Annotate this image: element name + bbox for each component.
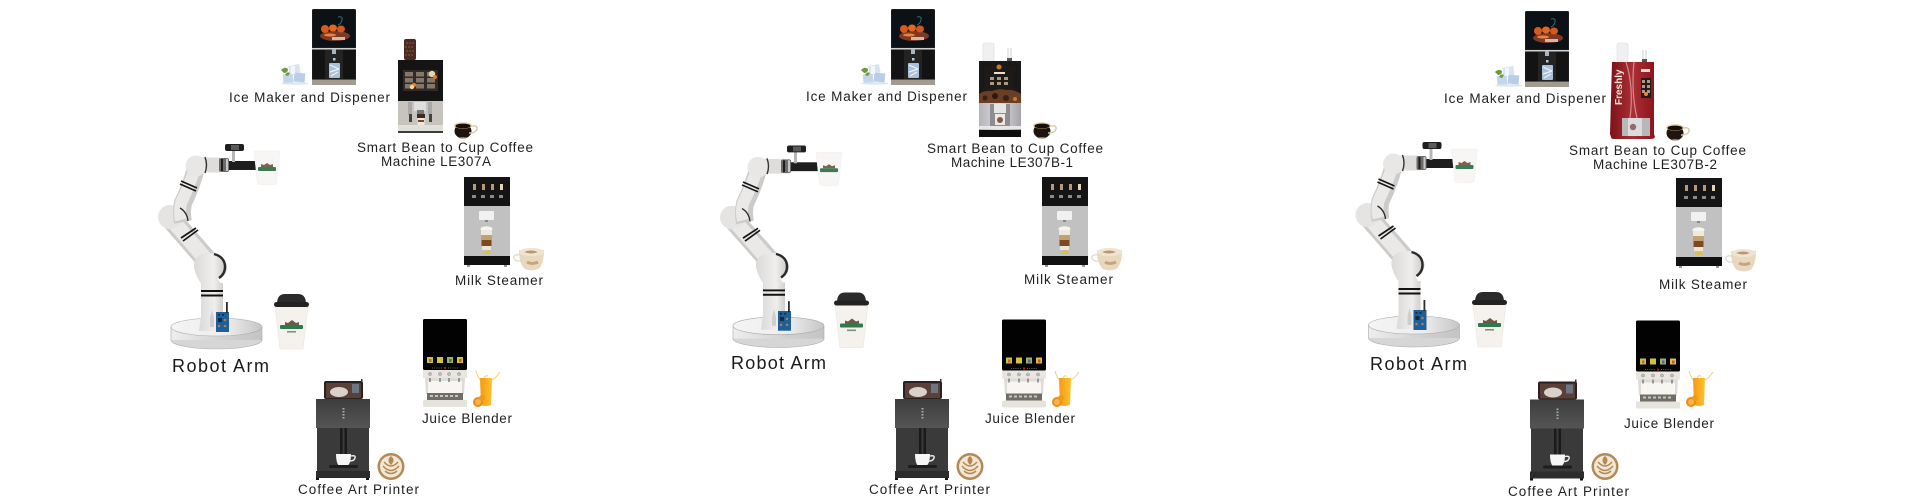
icon: latte art — [956, 453, 984, 480]
icon: coffee machine LE307B-1 — [979, 43, 1021, 137]
icon: orange juice glass — [1052, 371, 1079, 407]
label: art printer: Coffee Art Printer — [298, 482, 420, 497]
icon: latte mug — [1726, 249, 1756, 272]
icon: ice cubes — [861, 64, 889, 85]
icon: juice machine — [1002, 320, 1046, 408]
label: milk steamer: Milk Steamer — [455, 273, 544, 288]
icon: orange juice glass — [473, 371, 500, 407]
label: ice maker: Ice Maker and Dispener — [229, 90, 390, 105]
icon: lidded paper cup — [274, 294, 309, 349]
icon: latte art — [378, 453, 404, 480]
icon: ice cubes — [281, 64, 309, 85]
icon: latte art — [1592, 453, 1618, 480]
label: coffee machine: Machine LE307A — [381, 154, 491, 169]
icon: juice machine — [423, 319, 467, 407]
icon: lidded paper cup — [834, 292, 869, 348]
panel: LE307B-1 robot coffee station — [720, 9, 1122, 497]
label: juice blender: Juice Blender — [985, 411, 1076, 426]
icon: coffee machine LE307B-2: Freshly — [1614, 69, 1625, 105]
panel: LE307B-2 robot coffee station — [1356, 11, 1756, 499]
icon: robot arm — [1356, 142, 1478, 347]
label: robot arm: Robot Arm — [1370, 354, 1467, 374]
icon: orange juice glass — [1686, 371, 1713, 407]
icon: art printer — [316, 379, 370, 480]
label: coffee machine: Machine LE307B-1 — [951, 155, 1073, 170]
icon: latte mug — [514, 248, 544, 270]
icon: latte mug — [1092, 248, 1122, 270]
label: milk steamer: Milk Steamer — [1024, 272, 1114, 287]
label: milk steamer: Milk Steamer — [1659, 277, 1748, 292]
icon: black coffee cup — [1666, 124, 1689, 141]
icon: robot arm — [158, 144, 280, 349]
label: juice blender: Juice Blender — [422, 411, 512, 426]
label: art printer: Coffee Art Printer — [869, 482, 990, 497]
icon: ice cubes — [1495, 66, 1523, 87]
label: coffee machine: Machine LE307B-2 — [1593, 157, 1717, 172]
label: juice blender: Juice Blender — [1624, 416, 1714, 431]
icon: coffee machine LE307A — [398, 39, 443, 133]
icon: ice maker machine — [312, 9, 356, 85]
label: robot arm: Robot Arm — [731, 353, 826, 373]
icon: black coffee cup — [454, 122, 477, 139]
label: coffee machine: Smart Bean to Cup Coffee — [357, 140, 533, 155]
icon: milk steamer machine — [1676, 178, 1722, 268]
label: ice maker: Ice Maker and Dispener — [1444, 91, 1606, 106]
icon: milk steamer machine — [1042, 177, 1088, 267]
icon: milk steamer machine — [464, 177, 510, 267]
icon: ice maker machine — [891, 9, 935, 85]
icon: coffee machine LE307B-2 — [1610, 43, 1655, 139]
label: art printer: Coffee Art Printer — [1508, 484, 1630, 499]
icon: art printer — [895, 379, 949, 480]
label: coffee machine: Smart Bean to Cup Coffee — [927, 141, 1103, 156]
icon: ice maker machine — [1525, 11, 1569, 87]
label: robot arm: Robot Arm — [172, 356, 269, 376]
panel: LE307A robot coffee station — [158, 9, 544, 497]
label: coffee machine: Smart Bean to Cup Coffee — [1569, 143, 1746, 158]
icon: robot arm — [720, 146, 842, 347]
icon: lidded paper cup — [1472, 292, 1507, 347]
label: ice maker: Ice Maker and Dispener — [806, 89, 968, 104]
icon: juice machine — [1636, 320, 1680, 408]
icon: black coffee cup — [1033, 122, 1056, 139]
icon: art printer — [1530, 380, 1584, 480]
